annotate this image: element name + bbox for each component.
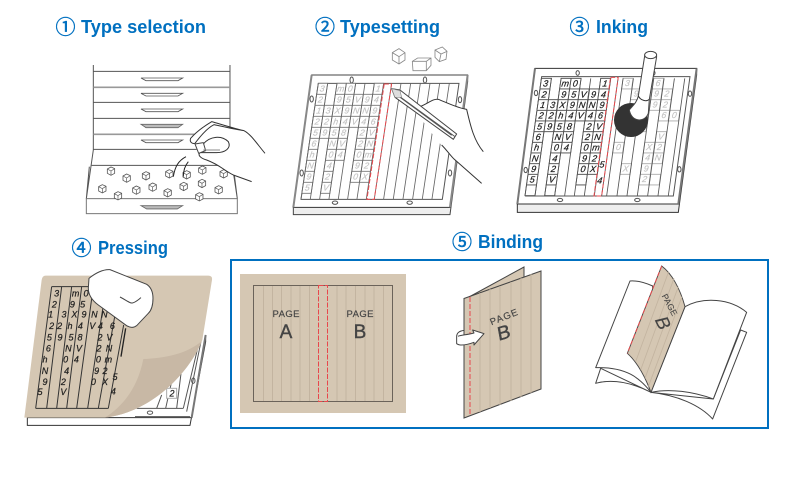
arrow xyxy=(457,330,484,345)
heading: step 3 inking xyxy=(570,11,648,40)
type grid: 3m01 xyxy=(319,84,381,94)
printed columns: 4 xyxy=(111,386,116,396)
type grid: N492 xyxy=(307,161,370,171)
type grid: 6NV2N xyxy=(311,139,375,149)
type grid xyxy=(301,83,449,199)
heading: step 3 inking: Inking xyxy=(596,16,648,37)
heading: step 4 pressing xyxy=(72,232,168,261)
type grid: 5V xyxy=(304,183,331,193)
right page xyxy=(651,300,747,399)
folded sheet: B xyxy=(496,321,512,346)
printed columns: h040m xyxy=(42,354,113,364)
printed columns: 13X9NN xyxy=(48,310,108,320)
brush handle xyxy=(629,51,657,120)
type grid: 13X9NN9 xyxy=(539,100,605,110)
open book xyxy=(596,266,747,419)
wooden frame xyxy=(293,75,468,215)
flat sheet with pages A and B xyxy=(240,274,406,413)
printed columns: 920X xyxy=(42,377,109,387)
heading: step 1 type selection xyxy=(56,11,206,40)
printed columns xyxy=(36,287,126,408)
type grid: X9 xyxy=(621,163,649,173)
printed columns: 5 xyxy=(112,372,118,382)
illustration: pressing sheet xyxy=(24,270,212,425)
type grid: 920X xyxy=(306,172,370,182)
type grid: 9V92 xyxy=(633,89,670,99)
type grid: 4N xyxy=(645,153,663,163)
flat sheet with pages A and B: B xyxy=(354,322,366,343)
heading: step 4 pressing: Pressing xyxy=(98,237,168,258)
printed columns: 6NV2N xyxy=(46,344,113,354)
type grid: V xyxy=(657,131,666,141)
wooden frame xyxy=(517,68,697,212)
printed columns: 3m0 xyxy=(54,288,88,298)
type grid: h040m xyxy=(309,150,373,160)
panel: binding xyxy=(231,260,768,428)
panel border xyxy=(231,260,768,428)
heading: step 4 pressing: ④ xyxy=(72,232,92,261)
type grid: 0X2 xyxy=(615,142,663,152)
type grid: h040m xyxy=(534,143,601,153)
drawer cabinet xyxy=(93,65,230,150)
type grid: 6NV2N xyxy=(535,132,602,142)
type grid: N xyxy=(638,121,646,131)
flat sheet with pages A and B: PAGE xyxy=(272,309,300,320)
turned page B: PAGE xyxy=(660,292,680,318)
type grid: 306 xyxy=(624,78,661,88)
printed columns: 5V xyxy=(37,387,67,397)
sheet curl xyxy=(105,341,202,418)
open tray xyxy=(86,150,237,214)
folded sheet: PAGE xyxy=(489,307,520,328)
type grid: 295V94 xyxy=(540,89,607,99)
type grid: 22h4V46 xyxy=(537,111,605,121)
motion lines xyxy=(173,157,188,177)
printed columns: N492 xyxy=(42,366,107,376)
illustration: type drawers and hand xyxy=(86,65,265,214)
left page xyxy=(596,281,653,392)
turned page B xyxy=(627,266,685,392)
heading: step 5 binding xyxy=(452,226,543,255)
heading: step 1 type selection: Type selection xyxy=(81,16,206,37)
ink ball xyxy=(614,103,648,137)
printed columns: 295 xyxy=(51,299,86,309)
type grid: N92 xyxy=(641,99,669,109)
heading: step 1 type selection: ① xyxy=(56,11,76,40)
illustration: typesetting frame with tweezers xyxy=(293,47,483,215)
heading: step 5 binding: Binding xyxy=(478,231,543,252)
loose type blocks xyxy=(392,47,447,71)
tweezers xyxy=(392,89,457,139)
flat sheet with pages A and B: A xyxy=(280,322,293,343)
type grid: 920X xyxy=(531,164,598,174)
type grid: 5 xyxy=(599,159,606,169)
type grid: N492 xyxy=(531,153,598,163)
heading: step 5 binding: ⑤ xyxy=(452,226,472,255)
type grid: 295V94 xyxy=(316,95,380,105)
type grid: 59582V xyxy=(312,128,376,138)
type grid: 3m01 xyxy=(542,79,608,89)
press pad xyxy=(88,270,153,327)
heading: step 3 inking: ③ xyxy=(570,11,590,40)
type grid: 4 xyxy=(597,175,603,185)
lower pages xyxy=(596,330,747,419)
type grid: 59582V xyxy=(537,121,604,131)
frame under sheet: 2 xyxy=(168,389,174,399)
type grid xyxy=(525,77,685,196)
type grid: 13X9NN9 xyxy=(316,106,378,116)
heading: step 2 typesetting: ② xyxy=(315,11,335,40)
heading: step 2 typesetting: Typesetting xyxy=(340,16,440,37)
hand xyxy=(190,122,265,182)
printed columns: 22h4V46 xyxy=(48,321,115,331)
turned page B: B xyxy=(651,313,675,333)
type grid: 5V xyxy=(529,175,557,185)
type grid: 2 xyxy=(641,174,648,184)
folded sheet xyxy=(457,267,541,418)
hand xyxy=(420,99,483,183)
type grid: 22h4V46 xyxy=(313,117,377,127)
type cubes in tray xyxy=(99,166,227,201)
illustration: inking the frame xyxy=(517,51,697,212)
heading: step 2 typesetting xyxy=(315,11,440,40)
printed sheet xyxy=(24,276,212,418)
frame under sheet xyxy=(27,335,206,425)
printed columns: 59582V xyxy=(47,333,113,343)
flat sheet with pages A and B: PAGE xyxy=(346,309,374,320)
type grid: V60 xyxy=(640,110,678,120)
